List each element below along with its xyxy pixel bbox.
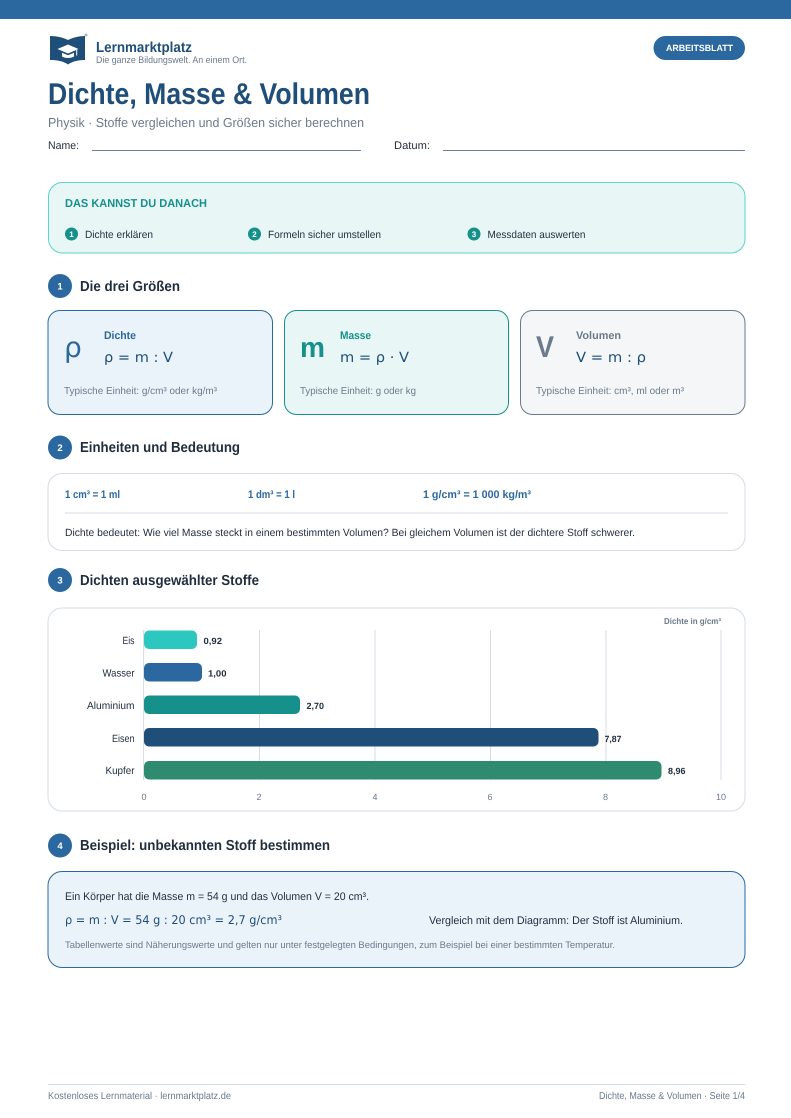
bar: Aluminium: 2,70 — [306, 701, 324, 711]
goal 2: Formeln sicher umstellen — [268, 229, 381, 241]
footer: Kostenloses Lernmaterial · lernmarktplatz.de — [48, 1091, 231, 1102]
goal 3: Messdaten auswerten — [488, 229, 586, 241]
section heading 1 — [48, 274, 180, 298]
bar chart: densities — [48, 608, 745, 811]
name and date fields — [48, 140, 745, 152]
section heading 4 — [48, 834, 330, 858]
bar: Eisen: Eisen — [112, 733, 135, 745]
symbol m: m — [300, 332, 325, 363]
label: Volumen — [576, 330, 621, 342]
x axis labels: 8 — [603, 792, 608, 802]
unit equation 3: 1 g/cm³ = 1 000 kg/m³ — [423, 489, 531, 501]
bar: Kupfer: Kupfer — [106, 765, 135, 777]
section heading 3: 3 — [57, 576, 63, 586]
icon: book with graduation cap — [50, 34, 88, 64]
goals heading: DAS KANNST DU DANACH — [65, 198, 207, 210]
unit equation 2: 1 dm³ = 1 l — [248, 489, 295, 501]
unit: Typische Einheit: g/cm³ oder kg/m³ — [64, 386, 218, 397]
bar: Wasser: Wasser — [102, 668, 135, 680]
brand name: Lernmarktplatz — [96, 40, 192, 56]
bar: Kupfer — [106, 761, 686, 780]
footer — [48, 1084, 745, 1102]
x axis labels: 2 — [256, 792, 262, 802]
subtitle: Physik · Stoffe vergleichen und Größen sicher berechnen — [48, 115, 364, 130]
bar: Eis: 0,92 — [204, 636, 222, 646]
panel: Volumen — [520, 310, 745, 414]
panel: units and meaning — [48, 474, 745, 550]
name and date fields: Datum: — [394, 140, 430, 152]
section heading 1: 1 — [57, 282, 63, 292]
x axis labels: 6 — [487, 792, 493, 802]
bar: Aluminium — [87, 696, 324, 714]
panel: learning goals — [48, 182, 745, 253]
name and date fields: Name: — [48, 140, 79, 152]
title: Dichte, Masse & Volumen — [48, 78, 370, 111]
meaning text: Dichte bedeutet: Wie viel Masse steckt in einem bestimmten Volumen? Bei gleichem Volumen ist der dichtere Stoff schwerer. — [65, 527, 635, 539]
bar: Kupfer: 8,96 — [668, 766, 686, 776]
top bar — [0, 0, 791, 19]
bar: Aluminium: Aluminium — [87, 700, 135, 712]
symbol V: V — [536, 331, 554, 364]
bar: Eisen: 7,87 — [604, 734, 622, 744]
section heading 2: 2 — [57, 443, 63, 454]
bar: Eis: Eis — [122, 635, 134, 647]
logo — [50, 34, 247, 66]
section heading 4: Beispiel: unbekannten Stoff bestimmen — [80, 838, 330, 854]
formula: ρ = m : V — [104, 350, 173, 366]
formula: V = m : ρ — [576, 350, 646, 366]
axis title: Dichte in g/cm³ — [664, 616, 721, 626]
label: Masse — [340, 330, 371, 342]
bar: Eis — [122, 630, 222, 649]
section heading 2: Einheiten und Bedeutung — [80, 440, 240, 456]
panel: Dichte — [48, 310, 272, 414]
unit equation 1: 1 cm³ = 1 ml — [65, 489, 120, 501]
section heading 3: Dichten ausgewählter Stoffe — [80, 573, 259, 589]
symbol rho: ρ — [64, 331, 82, 364]
goal 2: 2 — [252, 230, 257, 239]
x axis labels: 0 — [141, 792, 147, 802]
formula: m = ρ · V — [340, 350, 409, 366]
x axis labels: 10 — [716, 792, 726, 802]
goal 1 — [65, 228, 153, 241]
section heading 4: 4 — [57, 841, 63, 852]
bar: Wasser — [102, 663, 226, 682]
x axis labels: 4 — [372, 792, 378, 802]
label: Dichte — [104, 330, 136, 342]
calculation: ρ = m : V = 54 g : 20 cm³ = 2,7 g/cm³ — [65, 913, 282, 927]
footer: Dichte, Masse & Volumen · Seite 1/4 — [599, 1091, 745, 1102]
panel: Masse — [284, 310, 508, 414]
panel: worked example — [48, 872, 745, 968]
conclusion: Vergleich mit dem Diagramm: Der Stoff ist Aluminium. — [429, 915, 683, 927]
note: Tabellenwerte sind Näherungswerte und gelten nur unter festgelegten Bedingungen, zum Beispiel bei einer bestimmten Temperatur. — [65, 940, 615, 951]
goal 1: 1 — [69, 230, 74, 239]
badge: Arbeitsblatt — [654, 36, 745, 60]
tagline: Die ganze Bildungswelt. An einem Ort. — [96, 55, 247, 66]
badge: Arbeitsblatt: ARBEITSBLATT — [666, 43, 733, 53]
section heading 3 — [48, 568, 259, 592]
goal 3: 3 — [472, 230, 477, 239]
bar: Eisen — [112, 728, 622, 746]
unit: Typische Einheit: cm³, ml oder m³ — [536, 386, 685, 397]
section heading 1: Die drei Größen — [80, 279, 180, 295]
section heading 2 — [48, 436, 240, 460]
x axis labels — [141, 792, 726, 802]
bar: Wasser: 1,00 — [208, 668, 226, 678]
goal 1: Dichte erklären — [85, 229, 153, 241]
unit: Typische Einheit: g oder kg — [300, 386, 416, 397]
problem statement: Ein Körper hat die Masse m = 54 g und das Volumen V = 20 cm³. — [65, 891, 369, 903]
